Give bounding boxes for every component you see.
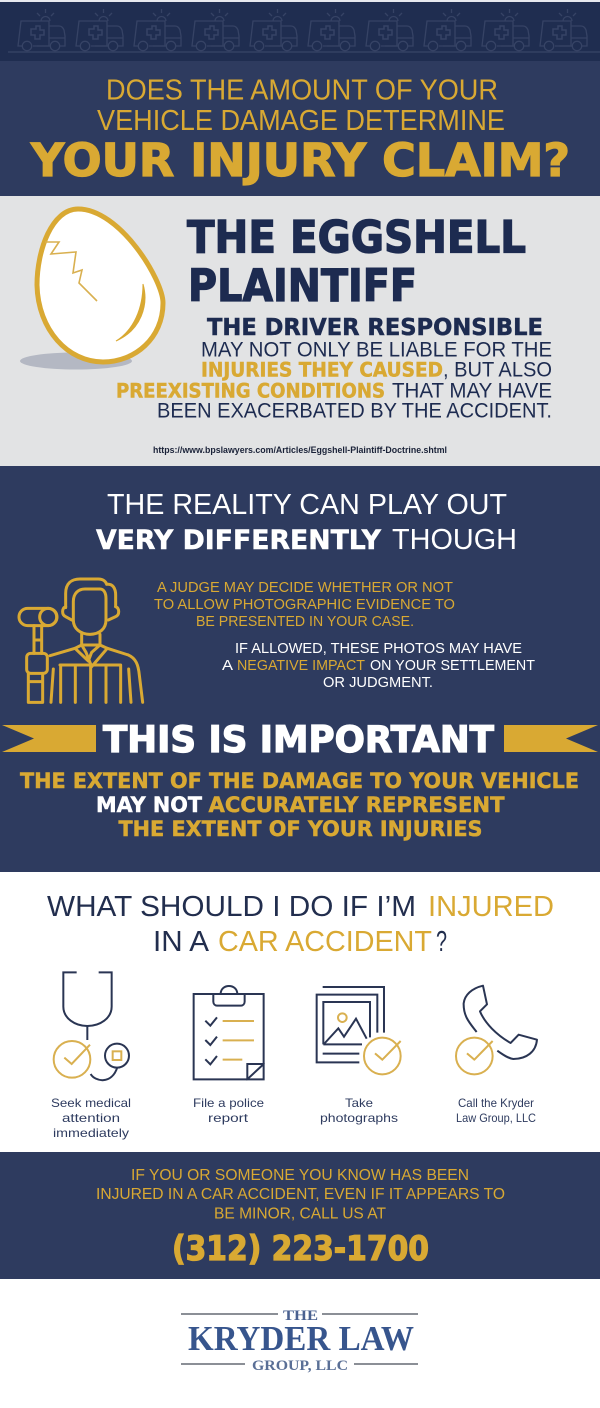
text block: driver responsible: MAY NOT ONLY BE LIABLE FOR THE (201, 339, 552, 362)
heading: what should i do: IN A (153, 926, 210, 958)
caption: take photographs: Take (345, 1096, 373, 1110)
phone number: (312) 223-1700 (172, 1229, 429, 1269)
caption: call the kryder law group: Law Group, LLC (456, 1111, 536, 1125)
caption: call the kryder law group: Call the Kryder (458, 1096, 534, 1110)
text block: photos impact: OR JUDGMENT. (323, 675, 433, 691)
heading: the reality: THE REALITY CAN PLAY OUT (107, 489, 507, 521)
logo: the kryder law group: KRYDER LAW (188, 1319, 414, 1358)
banner: this is important: THIS IS IMPORTANT (103, 718, 494, 761)
text block: extent of damage: THE EXTENT OF THE DAMAGE TO YOUR VEHICLE (20, 769, 579, 794)
caption: seek medical attention: attention (62, 1111, 120, 1125)
banner: this is important (2, 718, 598, 761)
source url: https://www.bpslawyers.com/Articles/Eggshell-Plaintiff-Doctrine.shtml (153, 445, 447, 455)
text block: photos impact (222, 641, 535, 691)
icon: stethoscope (54, 972, 129, 1080)
panel: title (0, 61, 600, 196)
caption: file a police report: report (208, 1111, 249, 1125)
heading: what should i do (47, 891, 554, 958)
panel: call to action (0, 1152, 600, 1279)
panel: the eggshell plaintiff (0, 196, 600, 466)
text block: judge may decide: A JUDGE MAY DECIDE WHETHER OR NOT (157, 580, 453, 596)
text block: photos impact: NEGATIVE IMPACT (237, 658, 365, 674)
caption: seek medical attention: Seek medical (51, 1096, 131, 1110)
heading: what should i do: WHAT SHOULD I DO IF I’M (47, 891, 416, 923)
icon: judge with gavel (19, 579, 143, 702)
heading: the eggshell plaintiff: THE EGGSHELL (187, 212, 526, 264)
text block: judge may decide: TO ALLOW PHOTOGRAPHIC EVIDENCE TO (154, 597, 455, 613)
logo: the kryder law group: GROUP, LLC (252, 1358, 348, 1374)
icon: cracked egg (20, 209, 163, 370)
panel: top ambulance strip (0, 0, 600, 61)
icon: telephone (456, 986, 537, 1074)
caption: file a police report (193, 1096, 264, 1125)
logo: the kryder law group: THE (283, 1308, 318, 1324)
text block: photos impact: IF ALLOWED, THESE PHOTOS MAY HAVE (235, 641, 522, 657)
caption: seek medical attention: immediately (53, 1126, 129, 1140)
text block: driver responsible (116, 313, 552, 423)
caption: call the kryder law group (456, 1096, 536, 1125)
caption: seek medical attention (51, 1096, 131, 1140)
text block: call us: IF YOU OR SOMEONE YOU KNOW HAS BEEN (131, 1167, 469, 1184)
panel: title: VEHICLE DAMAGE DETERMINE (97, 105, 505, 137)
text block: extent of damage: THE EXTENT OF YOUR INJURIES (118, 817, 482, 842)
text block: driver responsible: , BUT ALSO (443, 359, 552, 382)
heading: the reality: THOUGH (392, 524, 517, 556)
text block: call us: INJURED IN A CAR ACCIDENT, EVEN IF IT APPEARS TO (96, 1186, 505, 1203)
caption: take photographs (320, 1096, 398, 1125)
heading: the eggshell plaintiff: PLAINTIFF (188, 261, 417, 312)
text block: photos impact: A (222, 658, 233, 674)
text block: extent of damage: MAY NOT (96, 793, 202, 818)
text block: extent of damage: ACCURATELY REPRESENT (208, 793, 505, 818)
text block: driver responsible: BEEN EXACERBATED BY THE ACCIDENT. (157, 400, 552, 423)
logo: the kryder law group (181, 1308, 418, 1374)
text block: judge may decide (154, 580, 455, 630)
text block: driver responsible: THE DRIVER RESPONSIBLE (207, 313, 543, 341)
heading: what should i do: ? (436, 926, 447, 958)
text block: driver responsible: PREEXISTING CONDITIONS (116, 379, 385, 402)
heading: what should i do: CAR ACCIDENT (218, 926, 432, 958)
caption: file a police report: File a police (193, 1096, 264, 1110)
heading: the reality: VERY DIFFERENTLY (96, 525, 381, 556)
caption: take photographs: photographs (320, 1111, 398, 1125)
text block: driver responsible: INJURIES THEY CAUSED (201, 359, 443, 382)
panel: what should i do (0, 872, 600, 1152)
text block: photos impact: ON YOUR SETTLEMENT (370, 658, 535, 674)
panel: the reality (0, 466, 600, 872)
heading: the eggshell plaintiff (187, 212, 526, 312)
heading: the reality (96, 489, 517, 556)
text block: call us: BE MINOR, CALL US AT (214, 1206, 386, 1222)
panel: title: DOES THE AMOUNT OF YOUR (106, 74, 498, 106)
icon: photographs (317, 987, 401, 1074)
text block: driver responsible: THAT MAY HAVE (392, 379, 552, 402)
panel: title: YOUR INJURY CLAIM? (30, 134, 570, 187)
text block: call us (96, 1167, 505, 1222)
heading: what should i do: INJURED (428, 891, 554, 923)
text block: extent of damage (20, 769, 579, 842)
icon: clipboard checklist (194, 986, 264, 1079)
text block: judge may decide: BE PRESENTED IN YOUR CASE. (196, 614, 414, 630)
